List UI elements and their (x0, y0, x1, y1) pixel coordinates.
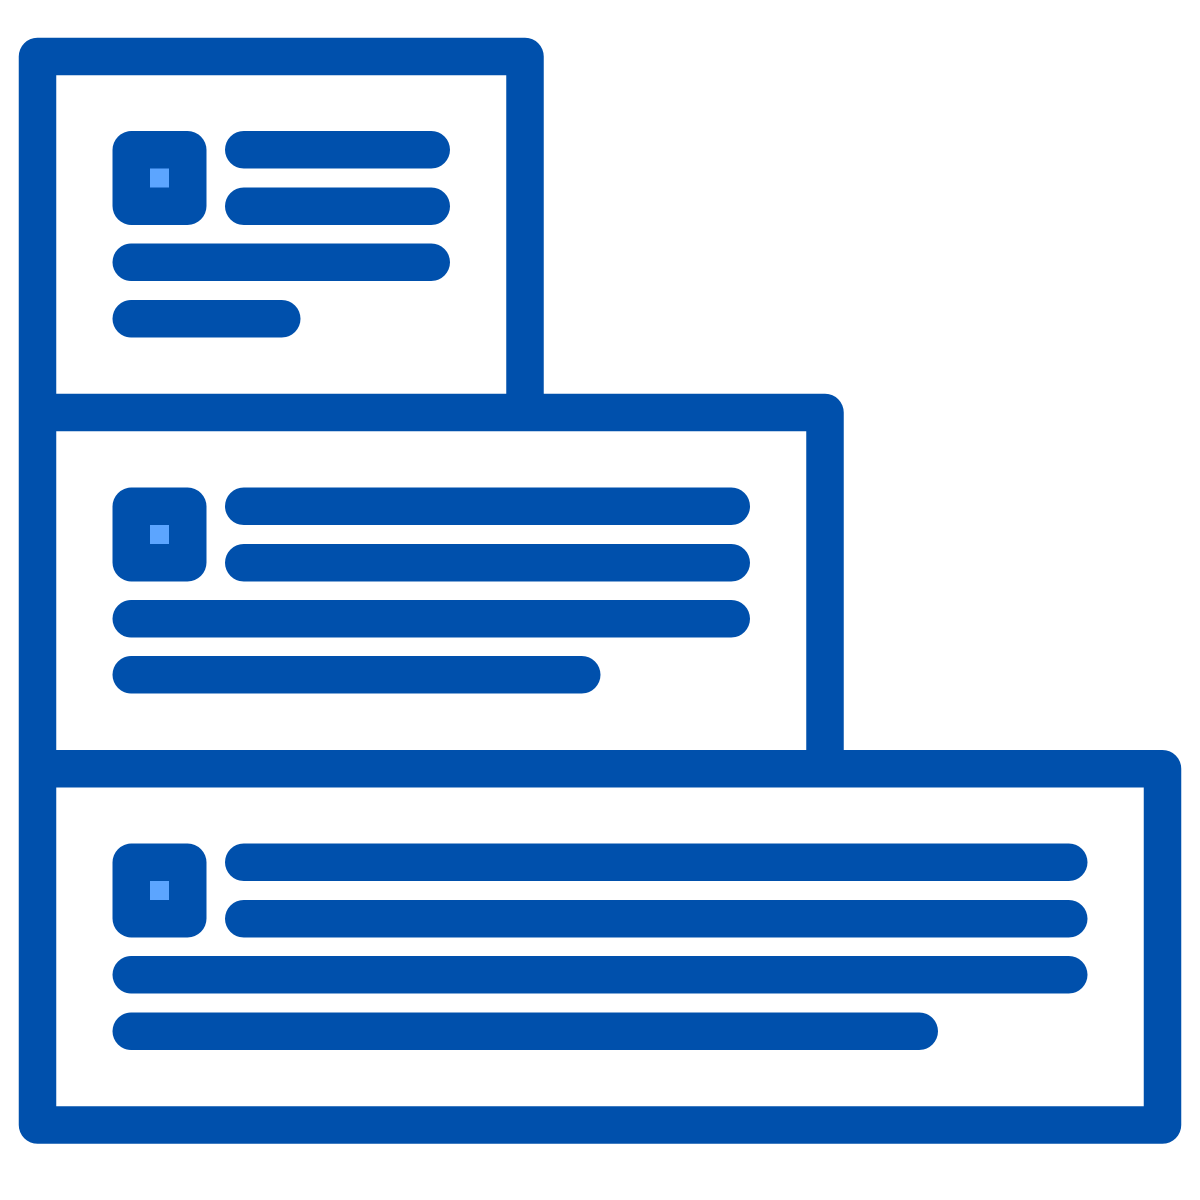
panel: middle card (19, 394, 844, 788)
icon: bottom card square (112, 844, 206, 938)
icon: middle card square (112, 488, 206, 582)
text lines: top card (112, 131, 450, 338)
icon: top card square (112, 131, 206, 225)
panel: top card (19, 38, 544, 431)
text lines: bottom card (112, 844, 1088, 1050)
panel: bottom card (19, 750, 1181, 1144)
text lines: middle card (112, 488, 750, 694)
